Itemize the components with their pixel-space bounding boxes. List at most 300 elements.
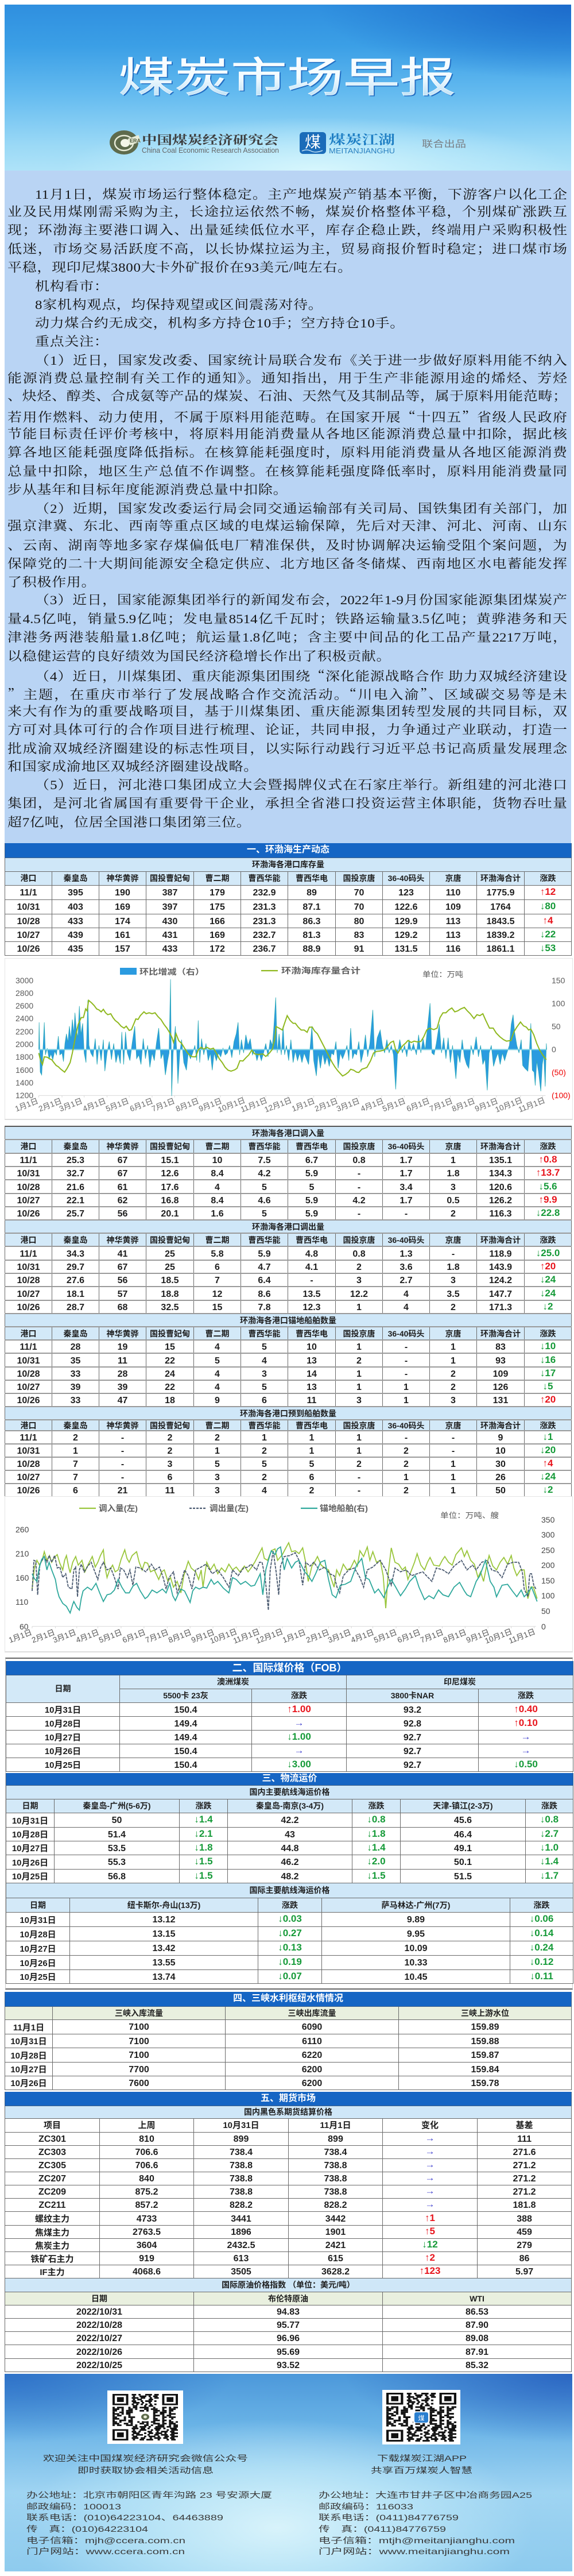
heading: section 4: 7600 (129, 2078, 149, 2088)
x-axis date labels: 2月1日 (305, 1628, 331, 1644)
heading: section 5: 焦炭主力 (35, 2241, 69, 2250)
heading: section 1: 129.9 (394, 917, 418, 926)
x-axis date labels: 1月1日 (7, 1628, 33, 1644)
sub-heading: inflow: 1.7 (400, 1169, 413, 1179)
table: international crude oil index: 96.96 (277, 2334, 300, 2343)
chart legend: 环比增减（右） (139, 967, 204, 976)
heading: section 5: ↓12 (422, 2239, 438, 2250)
text block: CCERA contact details: 联系电话：(010)64223104、64463889 (26, 2513, 223, 2522)
left axis labels: 2600 (15, 1001, 33, 1010)
table: section 5 futures market (5, 2092, 572, 2278)
sub-heading: inflow: 10/31 (17, 1169, 40, 1179)
heading: section 3: ↓0.8 (540, 1814, 559, 1825)
heading: section 1: 231.3 (253, 917, 276, 926)
sub-heading: inflow: 67 (118, 1156, 127, 1165)
sub-heading: inflow: ↓2 (543, 1301, 553, 1312)
sub-heading: inflow: 4.7 (258, 1262, 271, 1272)
heading: section 3: 涨跌 (369, 1801, 385, 1810)
sub-heading: inflow: 港口 (21, 1142, 37, 1151)
sub-heading: inflow: 10/27 (17, 1196, 40, 1206)
sub-heading: anchored ships: 环渤海各港口锚地船舶数量 (240, 1315, 336, 1324)
heading: section 1: 80 (354, 917, 364, 926)
table: international crude oil index: 93.52 (277, 2361, 300, 2370)
heading: section 3: 55.3 (108, 1857, 126, 1867)
chart legend: 调出量(左) (210, 1504, 249, 1513)
heading: section 1: 232.9 (253, 888, 276, 898)
sub-heading: inflow: 涨跌 (540, 1421, 556, 1430)
heading: section 2: 150.4 (174, 1760, 197, 1770)
sub-heading: inflow: 5.9 (258, 1249, 271, 1259)
heading: section 2: 93.2 (404, 1705, 421, 1715)
x-axis date labels: 3月1日 (58, 1096, 84, 1113)
heading: section 5: 111 (517, 2134, 532, 2144)
text: 和国家成渝地区双城经济圈建设战略。 (7, 760, 258, 774)
sub-heading: inflow: 10 (212, 1156, 222, 1165)
sub-heading: inflow: 3.4 (400, 1182, 413, 1192)
heading: section 5: 738.8 (324, 2161, 347, 2171)
sub-heading: inflow: 50 (495, 1486, 506, 1496)
sub-heading: inflow: ↓24 (540, 1471, 556, 1482)
heading: section 4: 三峡出库流量 (288, 2008, 336, 2017)
sub-heading: inflow: 56 (118, 1209, 127, 1219)
heading: section 2: 92.7 (404, 1732, 421, 1743)
x-axis date labels: 5月1日 (373, 1628, 398, 1644)
sub-heading: inflow: - (405, 1342, 408, 1352)
right axis labels: 0 (541, 1622, 546, 1631)
text block: market commentary: 8家机构观点，均保持观望或区间震荡对待。 (35, 299, 323, 312)
heading: section 5: → (425, 2199, 435, 2210)
sub-heading: inflow: ↓22.8 (536, 1207, 560, 1218)
x-axis date labels: 9月1日 (465, 1628, 491, 1644)
sub-heading: inflow: 21 (118, 1486, 127, 1496)
heading: section 5: 2763.5 (133, 2227, 161, 2237)
x-axis date labels: 7月1日 (428, 1096, 454, 1113)
heading: section 1: 123 (398, 888, 414, 898)
sub-heading: inflow: 5.9 (305, 1169, 318, 1179)
heading: section 5: → (425, 2146, 435, 2157)
heading: section 1: 10/27 (17, 930, 40, 940)
table: international crude oil index (5, 2278, 572, 2372)
sub-heading: inflow: 4 (215, 1182, 220, 1192)
sub-heading: inflow: 曹二期 (205, 1142, 230, 1151)
table: international freight: 10.33 (404, 1958, 428, 1968)
sub-heading: inflow: 14 (307, 1369, 317, 1379)
table: international freight: 10.09 (404, 1944, 428, 1953)
heading: section 1: 129.2 (394, 930, 418, 940)
right axis labels (541, 1515, 555, 1631)
heading: section 3: 10月25日 (12, 1872, 48, 1882)
sub-heading: inflow: 1 (451, 1342, 456, 1352)
sub-heading: inflow: ↓1 (543, 1431, 553, 1442)
sub-heading: inflow: 环渤海合计 (480, 1142, 521, 1151)
sub-heading: inflow: 27.6 (67, 1276, 84, 1285)
chart legend: 调入量(左) (99, 1504, 138, 1513)
text block: app download message: 共享百万煤炭人智慧 (371, 2466, 472, 2475)
sub-heading: inflow: 10/26 (17, 1486, 40, 1496)
heading: section 5: 875.2 (135, 2187, 158, 2197)
sub-heading: inflow: 19 (118, 1342, 127, 1352)
sub-heading: inflow: 国投京唐 (343, 1142, 375, 1151)
sub-heading: inflow: 环渤海各港口调入量 (252, 1128, 324, 1137)
sub-heading: inflow: ↓5.6 (538, 1181, 557, 1191)
heading: section 1: 435 (68, 944, 83, 953)
sub-heading: inflow: 国投京唐 (343, 1421, 375, 1430)
sub-heading: inflow: 港口 (21, 1235, 37, 1244)
table: section 3 domestic freight (6, 1773, 573, 1883)
icon: CCERA logo (110, 130, 141, 155)
sub-heading: inflow: 2 (73, 1433, 78, 1443)
sub-heading: inflow: 2 (262, 1446, 267, 1456)
x-axis date labels: 5月1日 (381, 1096, 407, 1113)
heading: section 5: 738.8 (230, 2174, 253, 2184)
heading: section 4: 三峡上游水位 (461, 2008, 509, 2017)
sub-heading: inflow: - (358, 1486, 360, 1496)
heading: section 5: 3628.2 (321, 2267, 350, 2277)
sub-heading: inflow: 36-40码头 (388, 1142, 424, 1151)
sub-heading: inflow: 62 (118, 1196, 127, 1206)
logo text: China Coal Economic Research Association: 中国煤炭经济研究会 (142, 131, 278, 148)
text block: market commentary: 强京津冀、东北、西南等重点区域的电煤运输保障，先后对天津、河北、河南、山东 (7, 520, 567, 533)
heading: section 3: 日期 (22, 1801, 38, 1810)
table: international freight: ↓0.13 (278, 1942, 302, 1953)
sub-heading: inflow: 0.8 (352, 1156, 366, 1165)
sub-heading: inflow: 41 (118, 1249, 127, 1259)
text block: CCERA contact details: 办公地址：北京市朝阳区青年沟路 23 号安源大厦 (26, 2490, 272, 2500)
table: international freight: ↓0.07 (278, 1970, 302, 1982)
heading: section 3: ↓1.8 (194, 1841, 213, 1853)
heading: section 4: 10月26日 (10, 2079, 47, 2088)
table: international freight: 国际主要航线海运价格 (250, 1886, 330, 1895)
heading: section 3: 43 (285, 1830, 295, 1839)
text block: market commentary: （1）近日，国家发改委、国家统计局联合发布《关于进一步做好原料用能不纳入 (35, 354, 567, 368)
sub-heading: inflow: 35 (71, 1355, 80, 1366)
heading: section 5: 899 (234, 2134, 249, 2144)
sub-heading: inflow: 1.8 (447, 1262, 460, 1272)
sub-heading: inflow: 39 (71, 1382, 80, 1392)
text block: Meitanjianghu contact details: 电子信箱：mtjh@meitanjianghu.com (319, 2536, 515, 2545)
x-axis date labels: 1月1日 (281, 1628, 307, 1644)
sub-heading: inflow: 6 (215, 1262, 220, 1272)
heading: section 5: 828.2 (324, 2200, 347, 2210)
heading: section 3: 10月31日 (12, 1816, 48, 1825)
line: anchored ships (32, 1547, 537, 1613)
right axis labels: 50 (552, 1022, 561, 1031)
sub-heading: inflow: 4 (215, 1382, 220, 1392)
heading: section 1: 1764 (490, 902, 511, 912)
heading: section 3: ↓1.5 (367, 1870, 386, 1880)
x-axis date labels: 6月1日 (405, 1096, 431, 1113)
heading: section 3: ↓2.1 (194, 1828, 213, 1839)
sub-heading: inflow: 6 (262, 1396, 267, 1405)
table: international crude oil index: 2022/10/28 (76, 2320, 122, 2330)
sub-heading: inflow: 1.7 (400, 1196, 413, 1206)
text block: market commentary: 机构看市： (35, 280, 109, 293)
x-axis date labels: 2月1日 (30, 1628, 56, 1644)
column headers: 港口 (21, 874, 37, 883)
heading: section 3: 三、物流运价 (262, 1774, 317, 1783)
text block: Meitanjianghu contact details: 联系电话：(0411)84776759 (319, 2513, 459, 2522)
x-axis date labels: 1月1日 (290, 1096, 316, 1113)
heading: section 1: 10/26 (17, 944, 40, 953)
heading: section 1: 89 (307, 888, 317, 898)
sub-heading: inflow: 5.9 (305, 1209, 318, 1219)
heading: section 3: 56.8 (108, 1871, 126, 1882)
sub-heading: inflow: 25 (165, 1262, 175, 1272)
sub-heading: inflow: 涨跌 (540, 1235, 556, 1244)
right axis labels: (100) (552, 1091, 571, 1100)
sub-heading: inflow: 12.2 (350, 1289, 368, 1299)
heading: section 5: 五、期货市场 (261, 2094, 316, 2103)
sub-heading: inflow: 4 (262, 1355, 267, 1366)
sub-heading: inflow: - (121, 1433, 124, 1443)
heading: section 1 (5, 843, 571, 953)
x-axis date labels: 7月1日 (144, 1628, 170, 1644)
sub-heading: inflow: 港口 (21, 1421, 37, 1430)
table: international freight: 纽卡斯尔-舟山(13万) (127, 1900, 200, 1909)
sub-heading: inflow: 2 (168, 1446, 172, 1456)
sub-heading: inflow: 涨跌 (540, 1329, 556, 1338)
heading: section 3: 49.1 (454, 1844, 472, 1853)
sub-heading: inflow: 11/1 (20, 1249, 37, 1259)
table: international crude oil index: 95.69 (277, 2347, 300, 2357)
text: （5）近日，河北港口集团成立大会暨揭牌仪式在石家庄举行。新组建的河北港口 (35, 779, 567, 792)
x-axis date labels: 8月1日 (442, 1628, 468, 1644)
column headers: 曹西华能 (248, 874, 280, 883)
heading: section 5: 86 (519, 2254, 529, 2264)
text block: market commentary: 11月1日，煤炭市场运行整体稳定。主产地煤炭产销基本平衡，下游客户以化工企 (35, 188, 567, 202)
heading: section 4: 11月1日 (13, 2023, 44, 2032)
heading: section 5: 615 (328, 2254, 343, 2264)
heading: section 4: 159.78 (471, 2078, 499, 2088)
heading: section 1: 88.9 (302, 944, 321, 953)
sub-heading: inflow: 2 (451, 1369, 456, 1379)
sub-heading: inflow: - (405, 1209, 408, 1219)
table: international crude oil index: WTI (470, 2294, 484, 2303)
sub-heading: inflow: 116.3 (489, 1209, 512, 1219)
text block: market commentary: （3）近日，国家能源集团举行的新闻发布会，2022年1-9月份国家能源集团煤炭产 (35, 594, 567, 607)
heading: section 2: 涨跌 (518, 1691, 534, 1700)
sub-heading: inflow: 32.7 (67, 1169, 84, 1179)
sub-heading: inflow: 5 (262, 1459, 267, 1469)
heading: section 3: 天津-镇江(2-3万) (433, 1801, 493, 1810)
sub-heading: inflow: 25.7 (67, 1209, 84, 1219)
sub-heading: inflow: 10/28 (17, 1276, 40, 1285)
sub-heading: inflow: 4.2 (352, 1196, 366, 1206)
left axis labels: 2400 (15, 1014, 33, 1023)
chart plot (39, 979, 546, 1098)
sub-heading: inflow: 67 (118, 1262, 127, 1272)
text block: market commentary: 量4.5亿吨，销量5.9亿吨；发电量8514亿千瓦时；铁路运输量3.5亿吨；黄骅港务和天 (7, 613, 567, 626)
sub-heading: inflow: - (358, 1209, 360, 1219)
sub-heading: inflow: 国投京唐 (343, 1235, 375, 1244)
chart legend: 单位：万吨、艘 (440, 1511, 499, 1520)
heading: section 5: 828.2 (230, 2200, 253, 2210)
heading: section 4: 10月28日 (10, 2050, 47, 2061)
heading: section 4: 7100 (129, 2050, 149, 2060)
heading: section 4: 7700 (129, 2064, 149, 2075)
sub-heading: inflow: 2 (309, 1486, 314, 1496)
icon: Meitanjianghu logo: 煤 (305, 130, 321, 152)
chart legend (79, 1504, 499, 1520)
heading: section 3: 51.4 (108, 1830, 126, 1839)
sub-heading: inflow: 4 (404, 1289, 409, 1299)
table: international freight (6, 1883, 573, 1984)
sub-heading: inflow: 曹西华能 (248, 1235, 280, 1244)
sub-heading: inflow: 4.6 (258, 1196, 271, 1206)
heading: section 5: 上周 (138, 2121, 155, 2130)
left axis labels: 1400 (15, 1078, 33, 1087)
sub-heading: inflow: - (452, 1433, 455, 1443)
heading: section 3: 50 (112, 1816, 122, 1825)
heading: section 1: 387 (162, 888, 177, 898)
table: international freight: 10月25日 (20, 1972, 56, 1982)
sub-heading: inflow: 57 (118, 1289, 127, 1299)
text block: market commentary: 以稳健运营的良好绩效为国民经济稳增长作出了积极贡献。 (7, 650, 391, 663)
heading: section 1: 157 (115, 944, 130, 953)
text: 超7亿吨，位居全国港口集团第三位。 (7, 816, 251, 829)
x-axis date labels: 12月1日 (263, 1096, 293, 1114)
sub-heading: inflow: 曹西华电 (296, 1235, 328, 1244)
text block: market commentary: 业及民用煤刚需采购为主，长途拉运依然不畅，煤炭价格整体平稳，个别煤矿涨跌互 (7, 206, 567, 219)
sub-heading: inflow: 39 (118, 1382, 127, 1392)
sub-heading: inflow: 1 (356, 1303, 362, 1312)
text block: market commentary: 、云南、湖南等地多家存煤偏低电厂精准保供，及时协调解决运输受阻个案问题，为 (7, 539, 567, 553)
sub-heading: inflow: 11/1 (20, 1156, 37, 1165)
heading: section 3: 涨跌 (541, 1801, 557, 1810)
text block: CCERA contact details: 门户网站：www.ccera.com.cn (26, 2547, 185, 2556)
sub-heading: inflow: 12.3 (302, 1303, 321, 1312)
chart legend (120, 966, 463, 979)
sub-heading: inflow: 11 (165, 1486, 174, 1496)
sub-heading: inflow: 10/31 (17, 1355, 40, 1366)
sub-heading: inflow: 7 (73, 1473, 78, 1482)
heading: section 5: → (425, 2133, 435, 2144)
heading: section 1: 1861.1 (487, 944, 514, 953)
sub-heading: inflow: 9 (498, 1433, 503, 1443)
heading: section 1: 110 (446, 888, 460, 898)
logo text: China Coal Economic Research Association: China Coal Economic Research Association (142, 146, 279, 155)
text block: market commentary: 津港务两港装船量1.8亿吨；航运量1.8亿吨；含主要中间品的化工品产量2217万吨， (7, 631, 567, 644)
table: international crude oil index: 2022/10/27 (76, 2334, 122, 2343)
heading: section 1: 87.1 (302, 902, 321, 912)
heading: section 5: 国内黑色系期货结算价格 (244, 2107, 332, 2117)
sub-heading: inflow: 8.6 (258, 1289, 271, 1299)
heading: section 1: 1839.2 (487, 930, 514, 940)
text block: CCERA follow message: 即时获取协会相关活动信息 (77, 2466, 214, 2475)
sub-heading: inflow: 135.1 (489, 1156, 512, 1165)
sub-heading: inflow: 10/27 (17, 1473, 40, 1482)
heading: section 5: ZC209 (38, 2187, 66, 2197)
sub-heading: inflow: 2 (451, 1303, 456, 1312)
sub-heading: inflow: 1 (451, 1473, 456, 1482)
x-axis date labels: 11月1日 (507, 1627, 537, 1645)
heading: section 2: 150.4 (174, 1705, 197, 1715)
sub-heading: inflow: 13 (307, 1382, 317, 1392)
left axis labels (15, 976, 33, 1100)
heading: section 2: 二、国际煤价格（FOB） (232, 1662, 347, 1674)
sub-heading: inflow: ↓24 (540, 1274, 556, 1285)
sub-heading: inflow: 京唐 (445, 1142, 461, 1151)
sub-heading: inflow: 曹西华电 (296, 1329, 328, 1338)
heading: section 4: 159.88 (471, 2037, 499, 2046)
text block: market commentary: 低迷，市场交易活跃度不高，以长协煤拉运为主，贸易商报价暂时稳定；进口煤市场 (7, 243, 567, 256)
heading: section 1: 70 (354, 902, 364, 912)
heading: section 3: 10月27日 (12, 1844, 48, 1853)
x-axis date labels: 11月1日 (239, 1096, 269, 1114)
text block: market commentary: 节能目标责任评价考核中，将原料用能消费量从各地区能源消费总量中扣除，据此核 (7, 428, 567, 441)
sub-heading: inflow: 神华黄骅 (107, 1329, 139, 1338)
right axis labels: 300 (541, 1530, 555, 1539)
sub-heading: inflow: 11 (118, 1355, 127, 1366)
sub-heading: inflow: 秦皇岛 (63, 1421, 87, 1430)
sub-heading: inflow: 3 (168, 1459, 172, 1469)
table: international freight: 13.55 (152, 1958, 176, 1968)
table: international crude oil index: 87.90 (466, 2320, 488, 2330)
heading: section 2: 10月26日 (45, 1747, 81, 1756)
sub-heading: inflow: 25 (165, 1249, 175, 1259)
text block: CCERA contact details (26, 2490, 272, 2556)
heading: section 4: 三峡入库流量 (115, 2008, 163, 2017)
sub-heading: inflow: 11/1 (20, 1433, 37, 1443)
text block: CCERA contact details: 传 真：(010)64223104 (26, 2524, 148, 2533)
sub-heading: inflow: ↓10 (540, 1341, 556, 1351)
text block: market commentary: 算各地区能耗强度降低指标。在核算能耗强度时，原料用能消费量从各地区能源消费 (7, 446, 567, 459)
heading: section 5: 738.4 (324, 2148, 347, 2157)
sub-heading: inflow: 109 (493, 1369, 508, 1379)
frame: sections 2 and 3 (5, 1658, 573, 1990)
left axis labels: 110 (15, 1597, 29, 1606)
heading: section 3: ↓1.8 (367, 1828, 386, 1839)
heading: section 3: 涨跌 (195, 1801, 211, 1810)
sub-heading: inflow: 10 (307, 1342, 317, 1352)
sub-heading: inflow: 36-40码头 (388, 1235, 424, 1244)
heading: section 1: 433 (162, 944, 177, 953)
heading: section 2: ↓1.00 (287, 1731, 311, 1741)
sub-heading: inflow: ↓25.0 (536, 1248, 560, 1258)
sub-heading: inflow: 3 (451, 1276, 456, 1285)
heading: section 1: 131.5 (394, 944, 418, 953)
table: international freight: 13.74 (152, 1972, 176, 1982)
sub-heading: inflow: 10/26 (17, 1303, 40, 1312)
left axis labels: 1600 (15, 1065, 33, 1075)
x-axis date labels: 1月1日 (14, 1096, 40, 1113)
x-axis date labels: 2月1日 (37, 1096, 63, 1113)
heading: section 1: 236.7 (253, 944, 276, 953)
heading: section 4: 6200 (302, 2078, 322, 2088)
sub-heading: inflow: 7 (73, 1459, 78, 1469)
heading: section 1: ↑4 (543, 914, 553, 926)
table: international crude oil index: 86.53 (466, 2307, 488, 2317)
sub-heading: inflow: - (452, 1446, 455, 1456)
heading: section 5: ZC301 (38, 2134, 66, 2144)
heading: section 5: 4068.6 (133, 2267, 161, 2277)
sub-heading: inflow: 11/1 (20, 1342, 37, 1352)
heading: section 3: 10月26日 (12, 1857, 48, 1868)
column headers: 神华黄骅 (107, 874, 139, 883)
sub-heading: outflow: 环渤海各港口调出量 (252, 1222, 324, 1231)
heading: section 4 (5, 1992, 571, 2088)
logo text: China Coal Economic Research Association (142, 131, 279, 155)
sub-heading: inflow: 3 (262, 1369, 267, 1379)
text: 批成渝双城经济圈建设的标志性项目，以实际行动践行习近平总书记高质量发展理念 (7, 743, 567, 756)
sub-heading: inflow: 17.6 (161, 1182, 179, 1192)
heading: section 3: ↓1.4 (367, 1841, 386, 1853)
sub-heading: inflow: - (310, 1276, 313, 1285)
heading: section 4: 6090 (302, 2022, 322, 2032)
heading: section 1: 169 (210, 930, 225, 940)
heading: section 1: 109 (445, 902, 461, 912)
sub-heading: inflow: ↑0.8 (538, 1154, 557, 1165)
